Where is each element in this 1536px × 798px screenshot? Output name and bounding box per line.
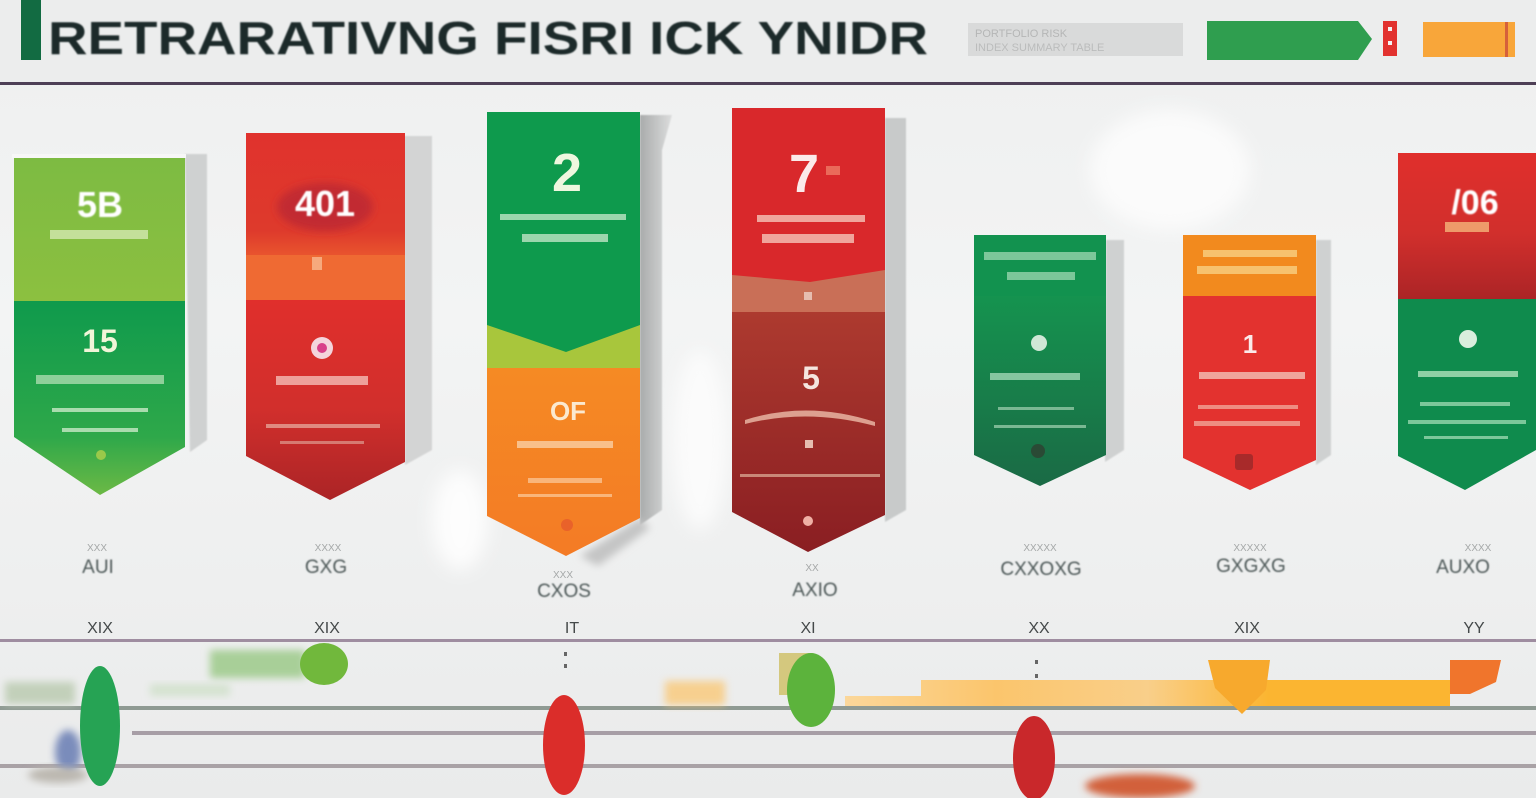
panel 6: orange/red: 1	[1243, 329, 1257, 359]
column labels: GXG	[305, 557, 347, 578]
header subtitle: INDEX SUMMARY TABLE	[975, 42, 1104, 54]
column tick labels: IT	[565, 620, 579, 637]
orange band	[665, 681, 725, 705]
panel 3: green/orange: OF	[550, 396, 586, 426]
legend: orange bar	[1423, 22, 1515, 57]
title accent	[21, 0, 41, 60]
axis lines	[0, 639, 1536, 642]
column tick labels: XI	[800, 620, 816, 637]
legend: red mark	[1383, 21, 1397, 56]
panel 7: red/green (clipped): /06	[1451, 184, 1499, 222]
small captions above labels: XX	[805, 563, 819, 574]
column labels: AUXO	[1436, 557, 1490, 578]
red marker 5	[1013, 716, 1055, 798]
panel 1: green	[12, 154, 207, 495]
blurred red smudge	[1085, 774, 1195, 798]
small captions above labels	[87, 543, 1492, 581]
column tick labels: YY	[1463, 620, 1485, 637]
header subtitle: PORTFOLIO RISK	[975, 28, 1068, 40]
blurred blue smudge	[55, 730, 81, 774]
panel 6: orange/red	[1183, 235, 1331, 490]
panel 2: red	[246, 133, 432, 500]
green marker 2	[300, 643, 348, 685]
column labels: AUI	[82, 557, 114, 578]
column tick labels: XIX	[314, 620, 340, 637]
column labels: AXIO	[792, 580, 838, 601]
title: RETRARATIVNG FISRI ICK YNIDR	[48, 12, 928, 64]
panel 3: green/orange	[487, 112, 672, 566]
panel 1: green: 15	[82, 323, 118, 359]
header subtitle	[968, 23, 1183, 56]
header bar	[0, 0, 1536, 85]
column tick labels: XIX	[1234, 620, 1260, 637]
column labels: GXGXG	[1216, 556, 1286, 577]
orange marker 7	[1450, 660, 1501, 694]
green marker 4	[779, 653, 835, 727]
column tick labels	[87, 620, 1485, 637]
blurred green band	[210, 650, 305, 678]
red marker 3	[543, 695, 585, 795]
small captions above labels: XXXX	[315, 543, 342, 554]
panel 7: red/green (clipped)	[1398, 153, 1536, 490]
timeline chart	[0, 639, 1536, 798]
orange marker 6	[1208, 660, 1270, 714]
small captions above labels: XXX	[553, 570, 573, 581]
column labels: CXOS	[537, 581, 591, 602]
panel 1: green: 5B	[77, 184, 123, 225]
column labels	[82, 556, 1490, 602]
small captions above labels: XXXXX	[1023, 543, 1057, 554]
green marker 1	[80, 666, 120, 786]
small captions above labels: XXXXX	[1233, 543, 1267, 554]
column tick labels: XIX	[87, 620, 113, 637]
small captions above labels: XXX	[87, 543, 107, 554]
panel 4: dark red: 7	[789, 144, 819, 204]
column labels: CXXOXG	[1000, 559, 1082, 580]
column tick labels: XX	[1028, 620, 1050, 637]
panel 3: green/orange: 2	[552, 143, 582, 203]
panel 4: dark red	[732, 108, 906, 552]
panel 2: red: 401	[295, 183, 355, 224]
panel 5: dark green	[974, 235, 1124, 486]
legend: green arrow	[1207, 21, 1372, 60]
dots	[564, 652, 1038, 678]
panel 4: dark red: 5	[802, 360, 820, 396]
small captions above labels: XXXX	[1465, 543, 1492, 554]
